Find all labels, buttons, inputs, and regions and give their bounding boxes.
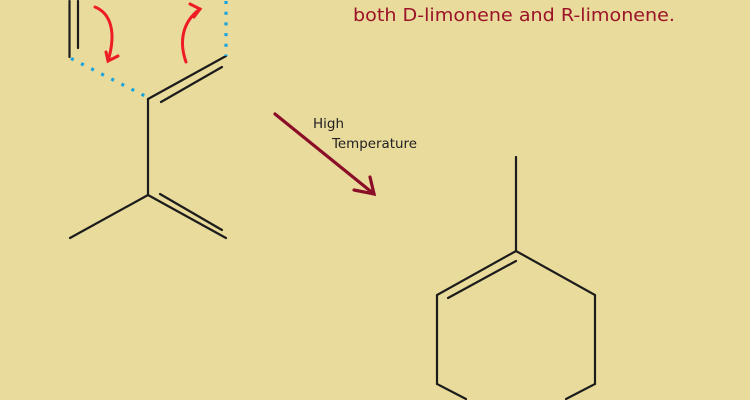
dotted bond: lower left <box>71 58 147 97</box>
heading text: both D-limonene and R-limonene. <box>353 5 675 26</box>
label: High Temperature: Temperature <box>331 136 417 152</box>
reactant molecule <box>70 1 226 238</box>
dotted bond: right <box>224 1 228 56</box>
red arrow: clockwise down <box>95 7 118 61</box>
label: High Temperature: High <box>313 116 344 132</box>
product molecule <box>437 157 595 399</box>
red arrow: curved up <box>183 4 200 62</box>
reaction arrow <box>275 114 374 194</box>
label: High Temperature <box>313 116 417 152</box>
